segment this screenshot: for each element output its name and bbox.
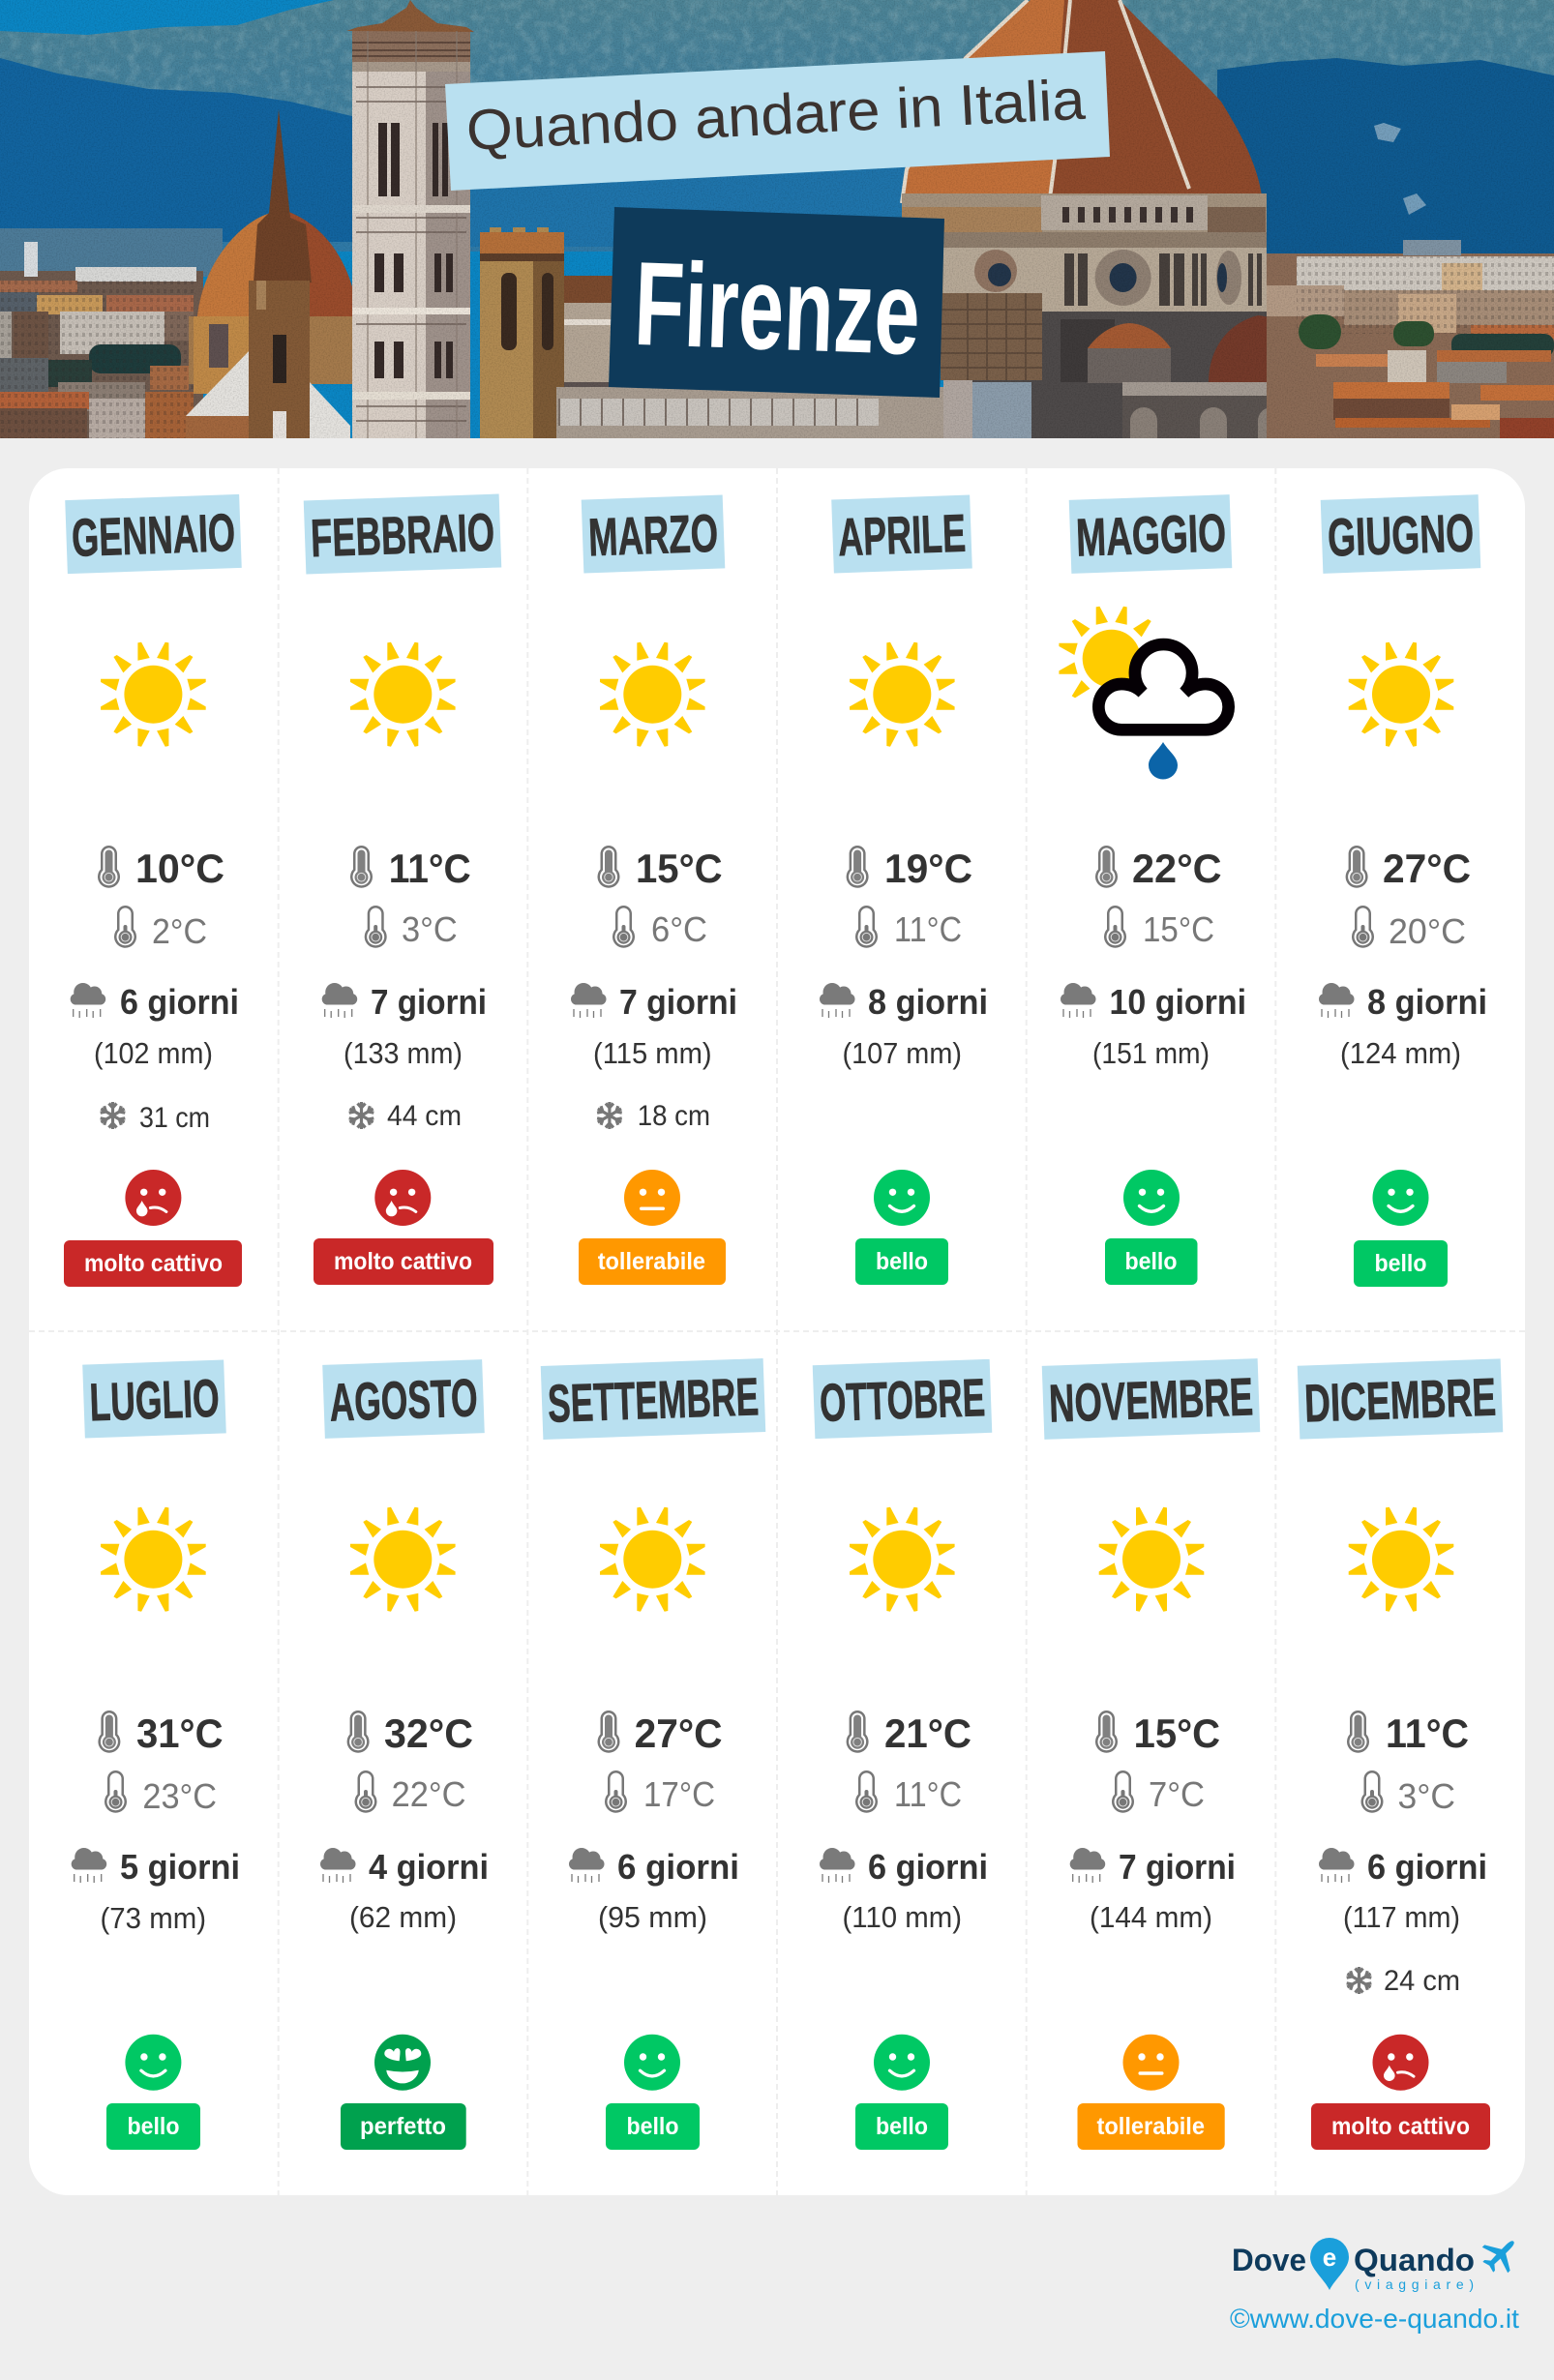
rating badge [314, 1238, 493, 1285]
panel: novembre [1042, 1358, 1260, 2150]
snowfall: 44 cm [387, 1100, 462, 1132]
icon: sun [1349, 1507, 1453, 1612]
rating icon: tolerable [1122, 2035, 1179, 2091]
rating icon: very bad [125, 1170, 181, 1226]
panel: agosto [320, 1359, 489, 2150]
rainy days [1319, 982, 1487, 1022]
heading: ottobre: OTTOBRE [819, 1367, 986, 1433]
rainy days: 7 giorni [1119, 1847, 1236, 1887]
heading: agosto [322, 1359, 485, 1439]
precipitation: (102 mm) [94, 1036, 213, 1070]
rating badge: perfetto [360, 2113, 446, 2140]
rainy days: 8 giorni [868, 982, 988, 1022]
rainy days: 10 giorni [1109, 982, 1246, 1022]
icon: map pin [1310, 2238, 1349, 2290]
rainy days [1070, 1847, 1236, 1887]
rating icon: good [1372, 1170, 1428, 1226]
heading: settembre: SETTEMBRE [547, 1366, 760, 1434]
heading: settembre [541, 1358, 765, 1440]
icon: sun [600, 642, 705, 747]
low temperature [1104, 906, 1214, 949]
rating badge [64, 1240, 242, 1287]
precipitation: (133 mm) [344, 1036, 463, 1070]
high temperature: 27°C [1383, 846, 1471, 891]
low temperature: 15°C [1143, 909, 1214, 949]
rating badge: tollerabile [598, 1248, 705, 1275]
low temperature [354, 1770, 466, 1814]
low temperature: 23°C [142, 1776, 217, 1816]
rating icon: good [874, 2035, 930, 2091]
rating badge [579, 1238, 726, 1285]
rating badge: bello [1374, 1250, 1426, 1277]
heading: maggio: MAGGIO [1075, 502, 1227, 568]
rainy days [820, 982, 988, 1022]
low temperature [114, 906, 207, 951]
low temperature [605, 1770, 715, 1814]
panel: settembre [541, 1358, 765, 2150]
precipitation: (73 mm) [101, 1901, 206, 1935]
snowfall: 18 cm [638, 1100, 710, 1132]
precipitation: (62 mm) [349, 1900, 457, 1934]
rating badge [106, 2103, 200, 2150]
high temperature [1095, 1711, 1220, 1756]
rating badge: molto cattivo [84, 1250, 223, 1277]
title box: Firenze: Firenze [632, 238, 922, 380]
title box: Firenze [609, 207, 944, 398]
precipitation: (117 mm) [1343, 1900, 1460, 1934]
icon: sun [101, 642, 206, 747]
rainy days: 8 giorni [1367, 982, 1487, 1022]
icon: sun [1349, 642, 1453, 747]
header photo: Firenze skyline with cathedral [0, 0, 1554, 446]
panel: maggio [1059, 494, 1246, 1285]
heading: luglio [82, 1359, 226, 1439]
heading: marzo [582, 494, 725, 574]
heading: agosto: AGOSTO [328, 1367, 479, 1433]
precipitation: (124 mm) [1340, 1036, 1461, 1070]
snowfall [99, 1102, 210, 1134]
rainy days [322, 982, 487, 1022]
heading: giugno: GIUGNO [1327, 502, 1475, 568]
heading: aprile: APRILE [837, 503, 967, 567]
rating badge: bello [1124, 1248, 1177, 1275]
rainy days [320, 1847, 489, 1887]
rating icon: good [624, 2035, 680, 2091]
high temperature: 27°C [635, 1711, 723, 1756]
heading: aprile [831, 495, 972, 573]
snowfall [347, 1100, 462, 1132]
rating badge: tollerabile [1097, 2113, 1205, 2140]
low temperature [855, 1770, 962, 1814]
low temperature: 3°C [1397, 1776, 1455, 1816]
rainy days: 5 giorni [120, 1847, 240, 1887]
high temperature: 11°C [389, 846, 471, 891]
precipitation: (151 mm) [1092, 1036, 1210, 1070]
snowfall [596, 1100, 710, 1132]
rating icon: tolerable [624, 1170, 680, 1226]
low temperature [855, 906, 962, 949]
rating badge [606, 2103, 700, 2150]
rating badge [1354, 1240, 1448, 1287]
rating badge [341, 2103, 466, 2150]
high temperature [1346, 846, 1471, 891]
rainy days [1319, 1847, 1487, 1887]
low temperature: 22°C [392, 1774, 466, 1814]
rainy days [72, 1847, 240, 1887]
heading: dicembre [1298, 1358, 1503, 1440]
icon: sun [350, 642, 456, 747]
high temperature: 10°C [135, 846, 224, 891]
low temperature: 17°C [643, 1774, 715, 1814]
rainy days: 7 giorni [371, 982, 487, 1022]
icon: airplane [1476, 2229, 1526, 2279]
high temperature: 15°C [636, 846, 723, 891]
precipitation: (115 mm) [593, 1036, 712, 1070]
high temperature [598, 846, 723, 891]
rainy days: 6 giorni [1367, 1847, 1487, 1887]
rating badge: bello [876, 1248, 928, 1275]
heading: novembre [1042, 1358, 1260, 1440]
rating icon: good [125, 2035, 181, 2091]
high temperature [350, 846, 471, 891]
precipitation: (107 mm) [842, 1036, 962, 1070]
low temperature [1352, 906, 1466, 951]
high temperature: 15°C [1134, 1711, 1220, 1756]
rainy days [71, 982, 239, 1022]
rating badge: bello [627, 2113, 679, 2140]
high temperature [847, 846, 972, 891]
rating badge: bello [876, 2113, 928, 2140]
white calendar card [29, 468, 1525, 2195]
precipitation: (110 mm) [842, 1900, 962, 1934]
rainy days [571, 982, 737, 1022]
heading: maggio [1069, 494, 1232, 574]
icon: sun [1099, 1507, 1204, 1612]
rating badge: molto cattivo [1331, 2113, 1470, 2140]
icon: sun [350, 1507, 456, 1612]
panel: gennaio [64, 494, 242, 1287]
panel: luglio [72, 1359, 240, 2150]
rating icon: good [1123, 1170, 1180, 1226]
heading: ottobre [813, 1359, 992, 1439]
low temperature: 7°C [1149, 1774, 1205, 1814]
icon: sun [850, 1507, 955, 1612]
low temperature: 2°C [152, 911, 207, 951]
rating badge [855, 2103, 948, 2150]
low temperature: 6°C [651, 909, 707, 949]
icon: map pin: e [1323, 2243, 1336, 2272]
high temperature: 22°C [1132, 846, 1222, 891]
rainy days: 4 giorni [369, 1847, 489, 1887]
high temperature [98, 846, 224, 891]
logo: Dove e Quando viaggiare: Quando [1354, 2243, 1475, 2277]
rainy days: 6 giorni [120, 982, 239, 1022]
rainy days [820, 1847, 988, 1887]
rating badge [1311, 2103, 1490, 2150]
heading: novembre: NOVEMBRE [1048, 1366, 1254, 1434]
high temperature: 19°C [884, 846, 972, 891]
low temperature: 11°C [894, 1774, 962, 1814]
rating badge [855, 1238, 948, 1285]
rating badge: bello [128, 2113, 180, 2140]
rainy days: 6 giorni [868, 1847, 988, 1887]
high temperature [347, 1711, 473, 1756]
logo: Dove e Quando viaggiare: (viaggiare) [1355, 2276, 1474, 2292]
low temperature [105, 1770, 217, 1816]
precipitation: (144 mm) [1090, 1900, 1212, 1934]
low temperature [365, 906, 458, 949]
heading: marzo: MARZO [587, 503, 719, 567]
heading: febbraio: FEBBRAIO [310, 502, 495, 568]
panel: marzo [571, 494, 737, 1285]
panel: ottobre [813, 1359, 992, 2150]
rating badge [1078, 2103, 1225, 2150]
banner: Quando andare in Italia: Quando andare in Italia [464, 68, 1087, 163]
panel: aprile [820, 495, 988, 1285]
icon: sun [101, 1507, 206, 1612]
heading: giugno [1321, 494, 1480, 574]
snowfall: 31 cm [139, 1102, 210, 1134]
high temperature [598, 1711, 723, 1756]
precipitation: (95 mm) [598, 1900, 707, 1934]
rainy days: 7 giorni [619, 982, 737, 1022]
rating badge [1105, 1238, 1198, 1285]
high temperature: 32°C [384, 1711, 473, 1756]
rating icon: very bad [374, 1170, 431, 1226]
low temperature [613, 906, 707, 949]
low temperature: 3°C [402, 909, 458, 949]
low temperature: 20°C [1389, 911, 1466, 951]
heading: gennaio: GENNAIO [71, 502, 236, 568]
snowfall: 24 cm [1384, 1965, 1460, 1997]
panel: giugno [1319, 494, 1487, 1287]
low temperature [1112, 1770, 1205, 1814]
rainy days: 6 giorni [617, 1847, 739, 1887]
banner: Quando andare in Italia [445, 51, 1110, 191]
logo: Dove e Quando viaggiare: Dove [1232, 2243, 1306, 2277]
heading: gennaio [65, 494, 242, 574]
panel: dicembre [1298, 1358, 1503, 2150]
rating icon: very bad [1372, 2035, 1428, 2091]
icon: sun behind rain cloud [1059, 607, 1229, 780]
rating icon: good [874, 1170, 930, 1226]
icon: sun [600, 1507, 705, 1612]
rating badge: molto cattivo [334, 1248, 472, 1275]
low temperature: 11°C [894, 909, 962, 949]
snowfall [1345, 1965, 1460, 1997]
high temperature [1347, 1711, 1469, 1756]
website credit: ©www.dove-e-quando.it [1230, 2304, 1519, 2334]
low temperature [1360, 1770, 1455, 1816]
high temperature: 21°C [884, 1711, 971, 1756]
logo: Dove e Quando viaggiare [1232, 2229, 1526, 2292]
heading: luglio: LUGLIO [88, 1368, 221, 1432]
high temperature: 31°C [136, 1711, 223, 1756]
high temperature [847, 1711, 971, 1756]
heading: febbraio [304, 493, 501, 575]
icon: sun [850, 642, 955, 747]
high temperature [98, 1711, 224, 1756]
high temperature: 11°C [1386, 1711, 1469, 1756]
rating icon: perfect [374, 2035, 431, 2091]
panel: febbraio [304, 493, 501, 1285]
rainy days [569, 1847, 739, 1887]
